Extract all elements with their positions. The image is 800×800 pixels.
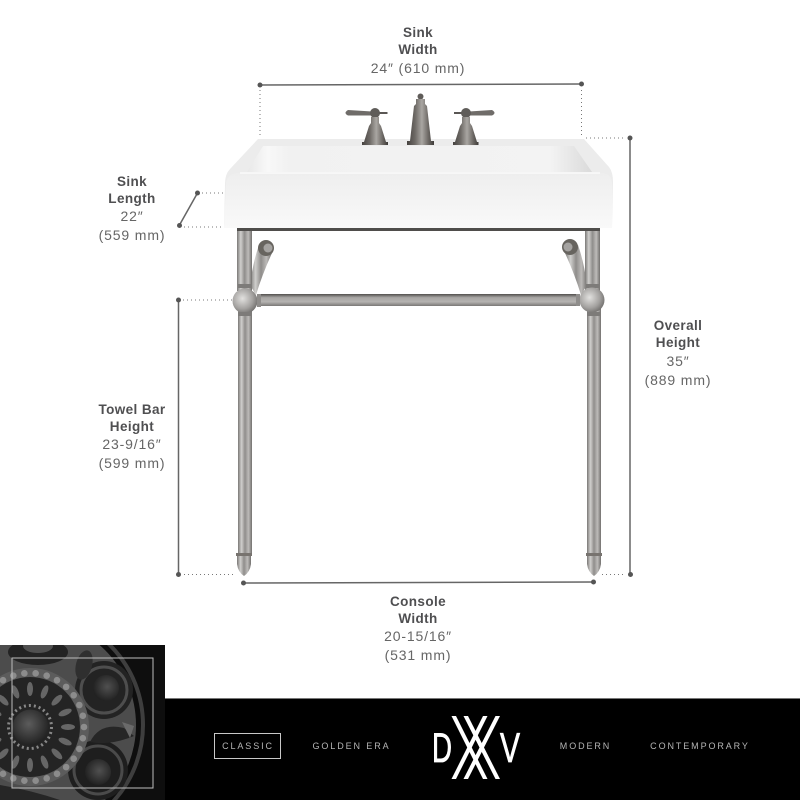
dimension: towel bar height: Height <box>110 419 154 434</box>
logo: DXV: D <box>432 724 452 771</box>
dimension: towel bar height <box>98 298 236 577</box>
dimension: overall height: Overall <box>654 318 702 333</box>
faucet: right handle <box>453 108 494 145</box>
nav: classic selected: CLASSIC <box>222 741 274 751</box>
rosette <box>0 668 89 786</box>
faucet: left handle <box>346 108 388 145</box>
nav: classic selected <box>214 734 280 758</box>
shelf rail under sink <box>237 228 600 231</box>
dimension: sink length: Length <box>108 191 156 206</box>
dimension: sink length: Sink <box>117 174 147 189</box>
ball joints <box>232 284 604 316</box>
dimension: console width: 20-15/16″ <box>384 628 452 644</box>
faucet: spout <box>407 94 434 145</box>
sink console product <box>224 94 613 576</box>
nav: golden era: GOLDEN ERA <box>312 741 391 751</box>
dimension: console width: Width <box>398 611 438 626</box>
dimension: console width: Console <box>390 594 446 609</box>
dimension: overall height: Height <box>656 335 700 350</box>
dimension: towel bar height: (599 mm) <box>99 455 165 471</box>
dimension: towel bar height: Towel Bar <box>98 402 166 417</box>
nav: modern: MODERN <box>560 741 611 751</box>
dimension: sink width: Width <box>398 42 438 57</box>
nav: contemporary: CONTEMPORARY <box>650 741 750 751</box>
dimension: towel bar height: 23-9/16″ <box>102 436 162 452</box>
dimension: overall height <box>586 136 711 577</box>
dimension: overall height: (889 mm) <box>645 372 711 388</box>
scroll ornaments <box>0 639 134 800</box>
logo: DXV: V <box>500 724 520 771</box>
dimension: sink length: 22″ <box>120 208 144 224</box>
dimension: sink width: 24″ (610 mm) <box>371 60 465 76</box>
dimension: sink width: Sink <box>403 25 433 40</box>
dimension: sink width <box>258 25 584 137</box>
dimension: sink length <box>99 174 224 243</box>
footer bar <box>165 698 800 800</box>
dimension: sink length: (559 mm) <box>99 227 165 243</box>
bead ring <box>0 670 87 784</box>
logo: DXV <box>432 716 520 779</box>
legs <box>236 229 602 576</box>
medallion frame <box>12 658 153 788</box>
sink basin <box>224 139 613 228</box>
dimension: overall height: 35″ <box>666 353 690 369</box>
medallion panel <box>0 645 165 800</box>
upper brackets <box>250 239 587 295</box>
towel bar <box>258 294 578 306</box>
dimension: console width <box>241 580 596 663</box>
footer top hairline <box>165 698 800 700</box>
dimension: console width: (531 mm) <box>385 647 451 663</box>
